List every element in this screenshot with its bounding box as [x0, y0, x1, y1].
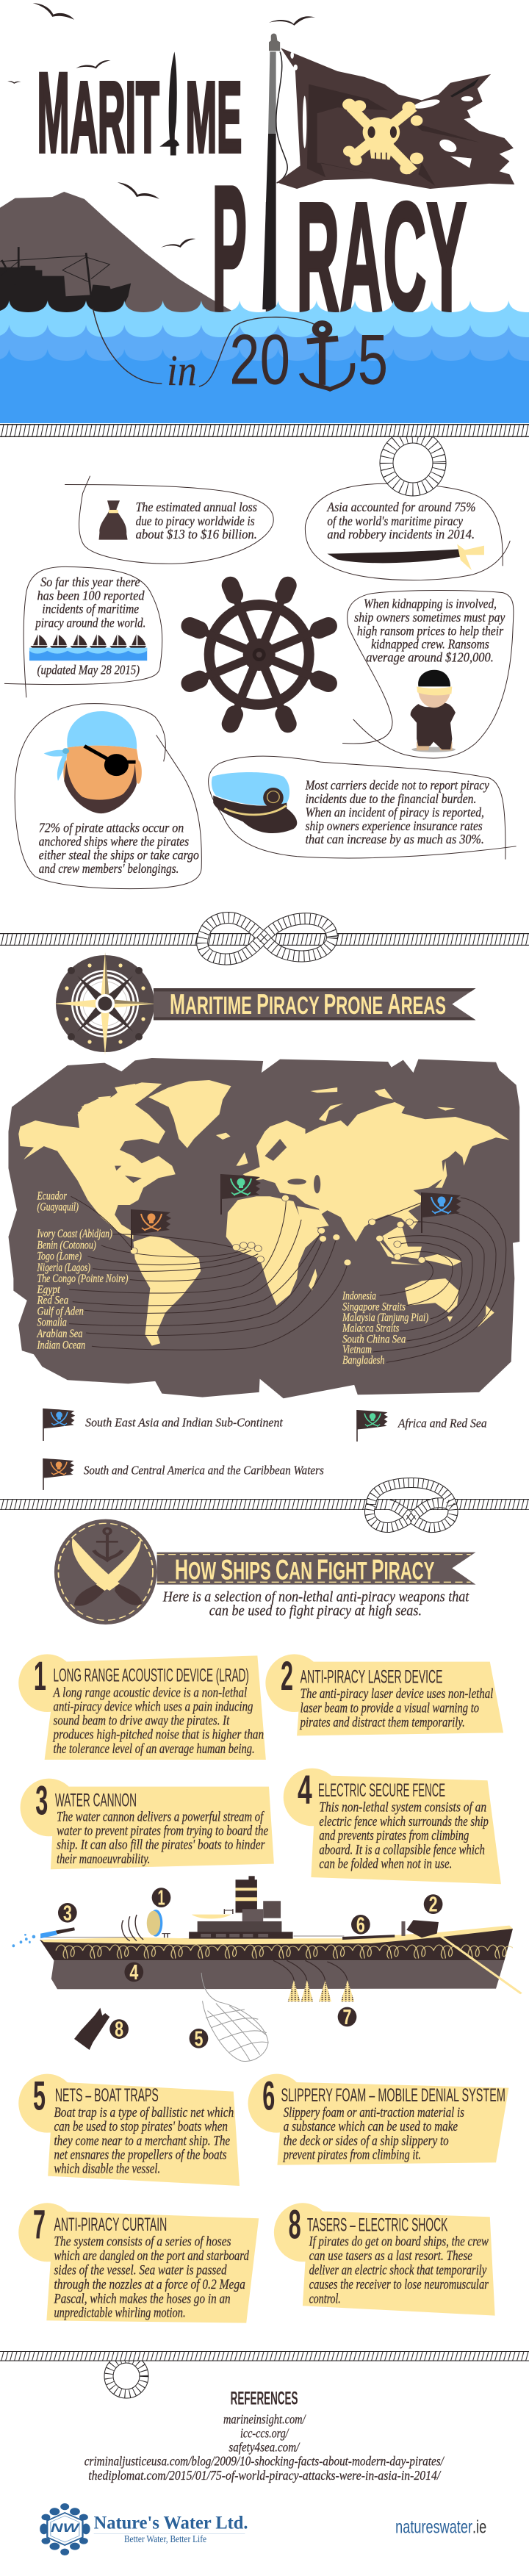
ship silhouette: [0, 247, 131, 317]
panel: unreported incidents: incidents due to the financial burden.: [306, 792, 476, 807]
logo: Nature's Water: Nature's Water Ltd.: [94, 2512, 248, 2533]
device: LRAD: [122, 1910, 170, 1941]
superstructure: [44, 1876, 405, 1939]
continents: [18, 1080, 509, 1346]
flag mast: [262, 34, 287, 309]
card 1: LRAD: 1: [34, 1653, 46, 1699]
icon: crossed swords badge: [54, 1519, 157, 1625]
banner: HOW SHIPS CAN FIGHT PIRACY: [175, 1553, 434, 1586]
hero: birds, island, ship, title, flag, sea: ME: [186, 62, 242, 173]
panel: 100 incidents: has been 100 reported: [37, 589, 145, 603]
card 1: LRAD: anti-piracy device which uses a pain inducing: [54, 1699, 253, 1713]
labels: West locations: Nigeria (Lagos): [37, 1262, 90, 1274]
references: [84, 2388, 445, 2483]
banner: MARITIME PIRACY PRONE AREAS: [170, 988, 446, 1020]
location dots: [130, 1195, 425, 1266]
panel: 100 incidents: incidents of maritime: [42, 602, 139, 616]
labels: East locations: Indonesia: [342, 1289, 376, 1302]
card 7: curtain: which are dangled on the port and starboard: [54, 2248, 249, 2263]
panel: 100 incidents: (updated May 28 2015): [37, 663, 140, 677]
references: safety4sea.com/: [228, 2440, 301, 2455]
panel: kidnapping: average around $120,000.: [366, 651, 494, 665]
title: in 2015: 20: [229, 320, 290, 400]
panel: 72% anchored ships: 72% of pirate attacks occur on: [39, 821, 184, 835]
device: laser: [406, 1920, 521, 1993]
card 1: LRAD: A long range acoustic device is a non-lethal: [52, 1685, 247, 1699]
panel: annual loss: about $13 to $16 billion.: [136, 528, 257, 542]
labels: West locations: Gulf of Aden: [37, 1305, 84, 1317]
title word: Maritime: [37, 50, 242, 176]
card 1: LRAD: the tolerance level of an average human being.: [54, 1741, 255, 1756]
panel: annual loss: [65, 476, 273, 564]
number badges: 5: [194, 2027, 203, 2051]
panel: kidnapping: kidnapped crew. Ransoms: [371, 638, 489, 652]
icon: pirate head: [44, 711, 142, 813]
panel: 100 incidents: [4, 566, 162, 697]
panel: kidnapping: [342, 591, 514, 758]
card 1: LRAD: produces high-pitched noise that is higher than: [52, 1727, 264, 1742]
number badges: 3: [63, 1902, 72, 1925]
title word: Maritime: I: [170, 62, 176, 173]
section heading: how ships can fight piracy: [54, 1519, 475, 1625]
labels: East locations: Bangladesh: [342, 1354, 384, 1366]
intro text: [162, 1589, 469, 1619]
labels: West locations: Togo (Lome): [37, 1250, 82, 1262]
card 5: nets: can be used to stop pirates' boats when: [54, 2118, 228, 2134]
number badges: [58, 1887, 442, 2051]
device: water cannon: [12, 1927, 75, 1947]
card 6: slippery foam: 6: [262, 2073, 275, 2119]
card 7: curtain: Pascal, which makes the hoses go in an: [54, 2291, 231, 2306]
panel: annual loss: due to piracy worldwide is: [136, 514, 255, 529]
title: in 2015: in: [167, 346, 197, 395]
legend text: South East Asia: South East Asia and Indian Sub-Continent: [85, 1415, 284, 1430]
intro text: can be used to fight piracy at high seas.: [209, 1603, 422, 1619]
number badges: 8: [115, 2018, 123, 2041]
card 5: nets: [18, 2073, 240, 2186]
number badges: 7: [343, 2006, 351, 2029]
sea waves: [0, 301, 529, 423]
card 8: tasers: control.: [309, 2291, 341, 2306]
card 7: curtain: unpredictable whirling motion.: [54, 2305, 186, 2320]
island: [0, 192, 234, 317]
icon: captain hat: [212, 772, 297, 833]
rope divider with loop: [0, 424, 529, 489]
labels: East locations: [342, 1289, 428, 1366]
map legend: [43, 1408, 487, 1490]
card 3: water cannon: WATER CANNON: [55, 1791, 137, 1810]
world map: [8, 1058, 519, 1398]
labels: East locations: South China Sea: [342, 1333, 406, 1345]
number badges: 4: [129, 1961, 138, 1985]
card 6: slippery foam: prevent pirates from climbing it.: [282, 2147, 421, 2162]
number badges: 6: [356, 1913, 365, 1937]
labels: West locations: Red Sea: [37, 1294, 68, 1306]
card 3: water cannon: water to prevent pirates from trying to board the: [57, 1823, 268, 1838]
title: in 2015: [93, 308, 388, 400]
panel: 72% anchored ships: and crew members' belongings.: [39, 862, 179, 876]
card 5: nets: NETS – BOAT TRAPS: [55, 2085, 159, 2106]
labels: West locations: Ecuador: [37, 1190, 67, 1202]
card 7: curtain: sides of the vessel. Sea water is passed: [54, 2262, 227, 2277]
title word: Maritime: ARIT: [71, 62, 159, 173]
card 7: curtain: through the nozzles at a force of 0.2 Mega: [54, 2276, 245, 2292]
card 8: tasers: [274, 2202, 495, 2316]
labels: West locations: Egypt: [37, 1284, 60, 1295]
panel: Asia 75%: of the world's maritime piracy: [327, 514, 464, 529]
card 4: electric fence: 4: [298, 1767, 312, 1813]
panel: 100 incidents: piracy around the world.: [35, 616, 145, 630]
panel: 72% anchored ships: [15, 704, 201, 889]
title: in 2015: 5: [358, 320, 388, 400]
title: in 2015: 1: [319, 320, 325, 400]
panel: annual loss: The estimated annual loss: [136, 500, 257, 515]
card 5: nets: 5: [33, 2073, 46, 2119]
rope divider with knot: [0, 1483, 529, 1528]
card 1: LRAD: sound beam to drive away the pirates. It: [54, 1713, 230, 1728]
legend flag: green: [356, 1410, 388, 1442]
panel: unreported incidents: [209, 756, 517, 860]
icon: compass badge: [54, 952, 156, 1055]
diagram: merchant ship with defences: [12, 1876, 521, 2062]
card 5: nets: Boat trap is a type of ballistic net which: [54, 2104, 234, 2120]
labels: West locations: (Guayaquil): [37, 1201, 79, 1213]
legend flag: blue: [43, 1408, 75, 1441]
card 2: laser: [265, 1653, 503, 1735]
number badges: 1: [157, 1887, 165, 1910]
logo: Nature's Water: Better Water, Better Life: [124, 2534, 206, 2544]
icon: orange flag: [131, 1209, 171, 1250]
labels: West locations: The Congo (Pointe Noire): [37, 1273, 128, 1285]
hull: [40, 1926, 513, 1989]
card 1: LRAD: [18, 1653, 266, 1760]
icon: blue flag: [421, 1192, 461, 1233]
panel: Asia 75%: [305, 483, 510, 580]
card 5: nets: net ensnares the propellers of the boats: [54, 2147, 227, 2162]
icon: sword replacing the letter I: [159, 51, 179, 156]
number badges: 2: [429, 1893, 438, 1916]
labels: West locations: Ivory Coast (Abidjan): [37, 1228, 112, 1240]
icon: snowflake: NW: [51, 2522, 81, 2535]
labels: West locations: Benin (Cotonou): [37, 1239, 96, 1251]
labels: West locations: Somalia: [37, 1316, 67, 1328]
labels: West locations: Arabian Sea: [36, 1328, 83, 1339]
icon: cutlass: [327, 544, 484, 570]
card 3: water cannon: The water cannon delivers a powerful stream of: [57, 1809, 264, 1824]
birds: [7, 3, 315, 248]
card 6: slippery foam: [248, 2073, 508, 2165]
card 3: water cannon: ship. It can also fill the pirates' boats to hinder: [57, 1837, 265, 1852]
card 7: curtain: [18, 2202, 259, 2323]
card 3: water cannon: their manoeuvrability.: [57, 1851, 150, 1866]
rope divider with loop: [0, 2351, 529, 2394]
card 7: curtain: The system consists of a series of hoses: [54, 2234, 231, 2249]
references: icc-ccs.org/: [240, 2426, 289, 2441]
legend flag: orange: [43, 1458, 74, 1490]
card 7: curtain: 7: [33, 2202, 46, 2248]
device: boat trap net: [201, 1973, 268, 2062]
legend text: Americas: South and Central America and the Caribbean Waters: [84, 1463, 324, 1478]
panel: 72% anchored ships: either steal the ships or take cargo: [39, 849, 199, 863]
panel: 72% anchored ships: anchored ships where the pirates: [39, 835, 189, 849]
labels: East locations: Singapore Straits: [342, 1300, 406, 1313]
map parchment: [8, 1058, 519, 1398]
icon: row of pirate ships: [29, 634, 147, 661]
section heading: prone areas: [54, 952, 475, 1055]
card 5: nets: which disable the vessel.: [54, 2161, 160, 2176]
title word: Maritime: M: [37, 50, 70, 176]
panel: 100 incidents: So far this year there: [40, 575, 140, 590]
device: slippery foam: [342, 1935, 395, 1940]
labels: East locations: Malacca Straits: [342, 1322, 399, 1334]
icon: blindfolded hostage: [411, 670, 456, 752]
icon: money bag: [99, 500, 128, 540]
title word: Piracy: [212, 149, 467, 350]
icon: ship's wheel: [179, 574, 340, 735]
icon: anchor: [301, 323, 353, 389]
references: REFERENCES: [231, 2388, 298, 2408]
title word: Piracy: I: [264, 170, 274, 344]
logo: Nature's Water: [40, 2503, 248, 2555]
icon: green flag: [220, 1174, 261, 1215]
panel: Asia 75%: Asia accounted for around 75%: [326, 500, 475, 515]
pirate flag: [277, 48, 514, 189]
rope divider with knot: [0, 918, 529, 960]
card 4: electric fence: [284, 1767, 501, 1884]
device: taser: [74, 2008, 109, 2050]
card 8: tasers: 8: [289, 2202, 301, 2248]
route lines: [69, 1196, 506, 1362]
labels: East locations: Malaysia (Tanjung Piai): [342, 1312, 428, 1324]
panel: Asia 75%: and robbery incidents in 2014.: [327, 528, 475, 542]
labels: West locations: [36, 1190, 128, 1351]
card 3: water cannon: 3: [35, 1777, 48, 1824]
panel: unreported incidents: that can increase by as much as 30%.: [306, 832, 484, 847]
references: marineinsight.com/: [223, 2412, 306, 2426]
icon: snowflake: [40, 2503, 90, 2555]
card 3: water cannon: [21, 1777, 274, 1869]
hero: birds, island, ship, title, flag, sea: [0, 3, 529, 423]
labels: East locations: Vietnam: [342, 1343, 372, 1356]
card 7: curtain: ANTI-PIRACY CURTAIN: [54, 2215, 167, 2235]
icon: skull and crossbones: [342, 98, 423, 174]
facts section: [4, 476, 517, 889]
title word: Piracy: P: [212, 149, 247, 350]
card 2: laser: 2: [281, 1653, 293, 1699]
labels: West locations: Indian Ocean: [37, 1339, 85, 1351]
device: anti-piracy curtain: [273, 1960, 354, 2001]
card 5: nets: they come near to a merchant ship. The: [54, 2133, 230, 2148]
